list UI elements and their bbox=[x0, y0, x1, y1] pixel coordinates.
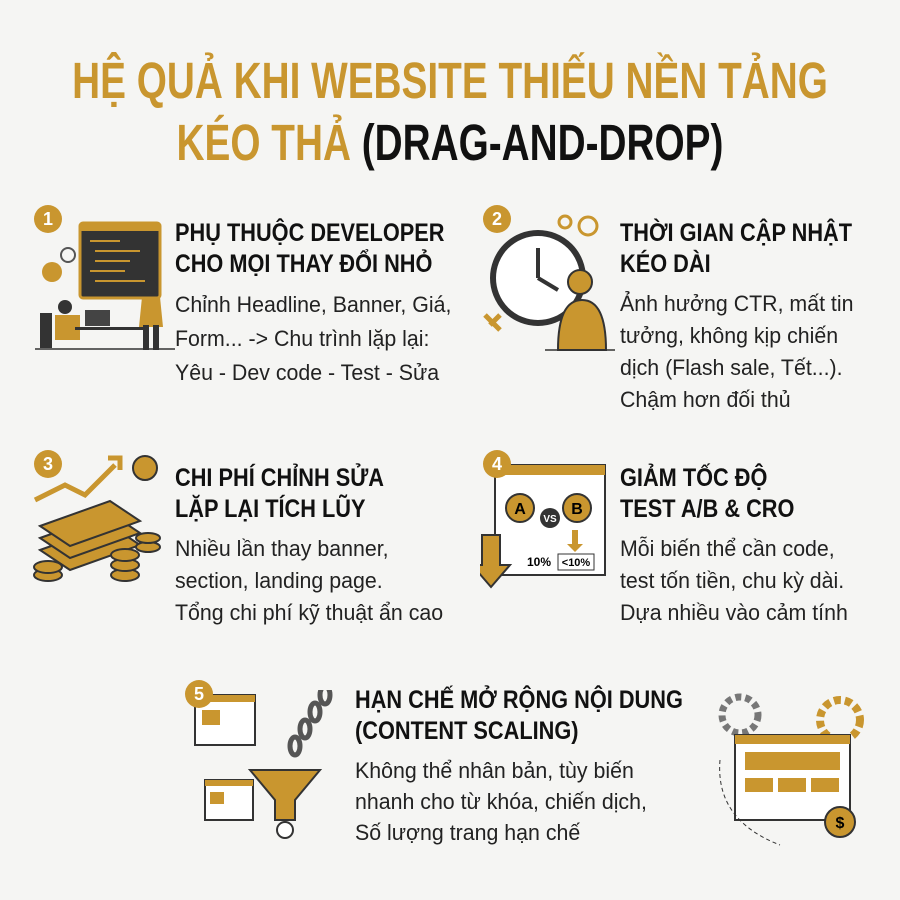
icon: clock and worried person bbox=[483, 214, 615, 351]
panel 5: content scaling bbox=[185, 680, 864, 846]
heading 4: test tốn tiền, chu kỳ dài. bbox=[620, 568, 844, 593]
heading 4: Mỗi biến thể cần code, bbox=[620, 536, 835, 561]
panel 3: accumulated costs bbox=[33, 450, 443, 625]
heading 3: Tổng chi phí kỹ thuật ẩn cao bbox=[175, 600, 443, 625]
heading 1: Chỉnh Headline, Banner, Giá, bbox=[175, 292, 451, 317]
badge 2: 2 bbox=[492, 209, 502, 229]
icon: A vs B test window: A bbox=[514, 501, 526, 518]
heading 1: Yêu - Dev code - Test - Sửa bbox=[175, 360, 439, 385]
badge 4 bbox=[483, 450, 511, 478]
title: HỆ QUẢ KHI WEBSITE THIẾU NỀN TẢNG bbox=[72, 52, 828, 109]
badge 1 bbox=[34, 205, 62, 233]
icon: A vs B test window: VS bbox=[543, 514, 557, 525]
badge 5 bbox=[185, 680, 213, 708]
icon: A vs B test window bbox=[480, 464, 606, 588]
heading 3: Nhiều lần thay banner, bbox=[175, 536, 389, 561]
heading 3: CHI PHÍ CHỈNH SỬA bbox=[175, 464, 384, 492]
icon: A vs B test window: 10% bbox=[527, 555, 551, 569]
heading 5: nhanh cho từ khóa, chiến dịch, bbox=[355, 789, 647, 814]
heading 3: LẶP LẠI TÍCH LŨY bbox=[175, 495, 366, 523]
icon: A vs B test window: B bbox=[571, 501, 583, 518]
heading 2: THỜI GIAN CẬP NHẬT bbox=[620, 219, 852, 247]
icon: pages, chain and funnel bbox=[194, 690, 332, 839]
icon: A vs B test window: <10% bbox=[562, 557, 590, 569]
heading 5: HẠN CHẾ MỞ RỘNG NỘI DUNG bbox=[355, 686, 683, 714]
badge 4: 4 bbox=[492, 454, 502, 474]
heading 4: TEST A/B & CRO bbox=[620, 495, 794, 523]
icon: page with gears and coin bbox=[718, 694, 864, 846]
heading 5: Không thể nhân bản, tùy biến bbox=[355, 758, 634, 783]
badge 3 bbox=[34, 450, 62, 478]
heading 3: section, landing page. bbox=[175, 568, 383, 593]
heading 2: Chậm hơn đối thủ bbox=[620, 387, 791, 412]
heading 4: GIẢM TỐC ĐỘ bbox=[620, 464, 767, 492]
heading 2: dịch (Flash sale, Tết...). bbox=[620, 355, 843, 380]
badge 5: 5 bbox=[194, 684, 204, 704]
heading 4 bbox=[620, 463, 848, 625]
heading 5: Số lượng trang hạn chế bbox=[355, 820, 580, 845]
heading 5 bbox=[355, 685, 683, 845]
icon: developer at desk with code screen bbox=[35, 222, 175, 350]
panel 1: developer dependence bbox=[34, 205, 451, 385]
badge 3: 3 bbox=[43, 454, 53, 474]
heading 1: PHỤ THUỘC DEVELOPER bbox=[175, 219, 444, 247]
heading 2: KÉO DÀI bbox=[620, 250, 711, 278]
badge 1: 1 bbox=[43, 209, 53, 229]
title: KÉO THẢ (DRAG-AND-DROP) bbox=[177, 114, 723, 171]
icon: money stacks and coins bbox=[33, 455, 161, 582]
heading 2 bbox=[620, 218, 853, 412]
heading 1 bbox=[175, 218, 451, 385]
title bbox=[72, 52, 828, 171]
heading 4: Dựa nhiều vào cảm tính bbox=[620, 600, 848, 625]
badge 2 bbox=[483, 205, 511, 233]
heading 1: Form... -> Chu trình lặp lại: bbox=[175, 326, 429, 351]
heading 2: Ảnh hưởng CTR, mất tin bbox=[620, 291, 853, 316]
heading 3 bbox=[175, 463, 443, 625]
heading 2: tưởng, không kịp chiến bbox=[620, 323, 838, 348]
panel 2: update time bbox=[483, 205, 853, 412]
icon: page with gears and coin: $ bbox=[836, 815, 845, 832]
heading 1: CHO MỌI THAY ĐỔI NHỎ bbox=[175, 250, 432, 278]
panel 4: A/B testing bbox=[480, 450, 848, 625]
heading 5: (CONTENT SCALING) bbox=[355, 717, 579, 745]
